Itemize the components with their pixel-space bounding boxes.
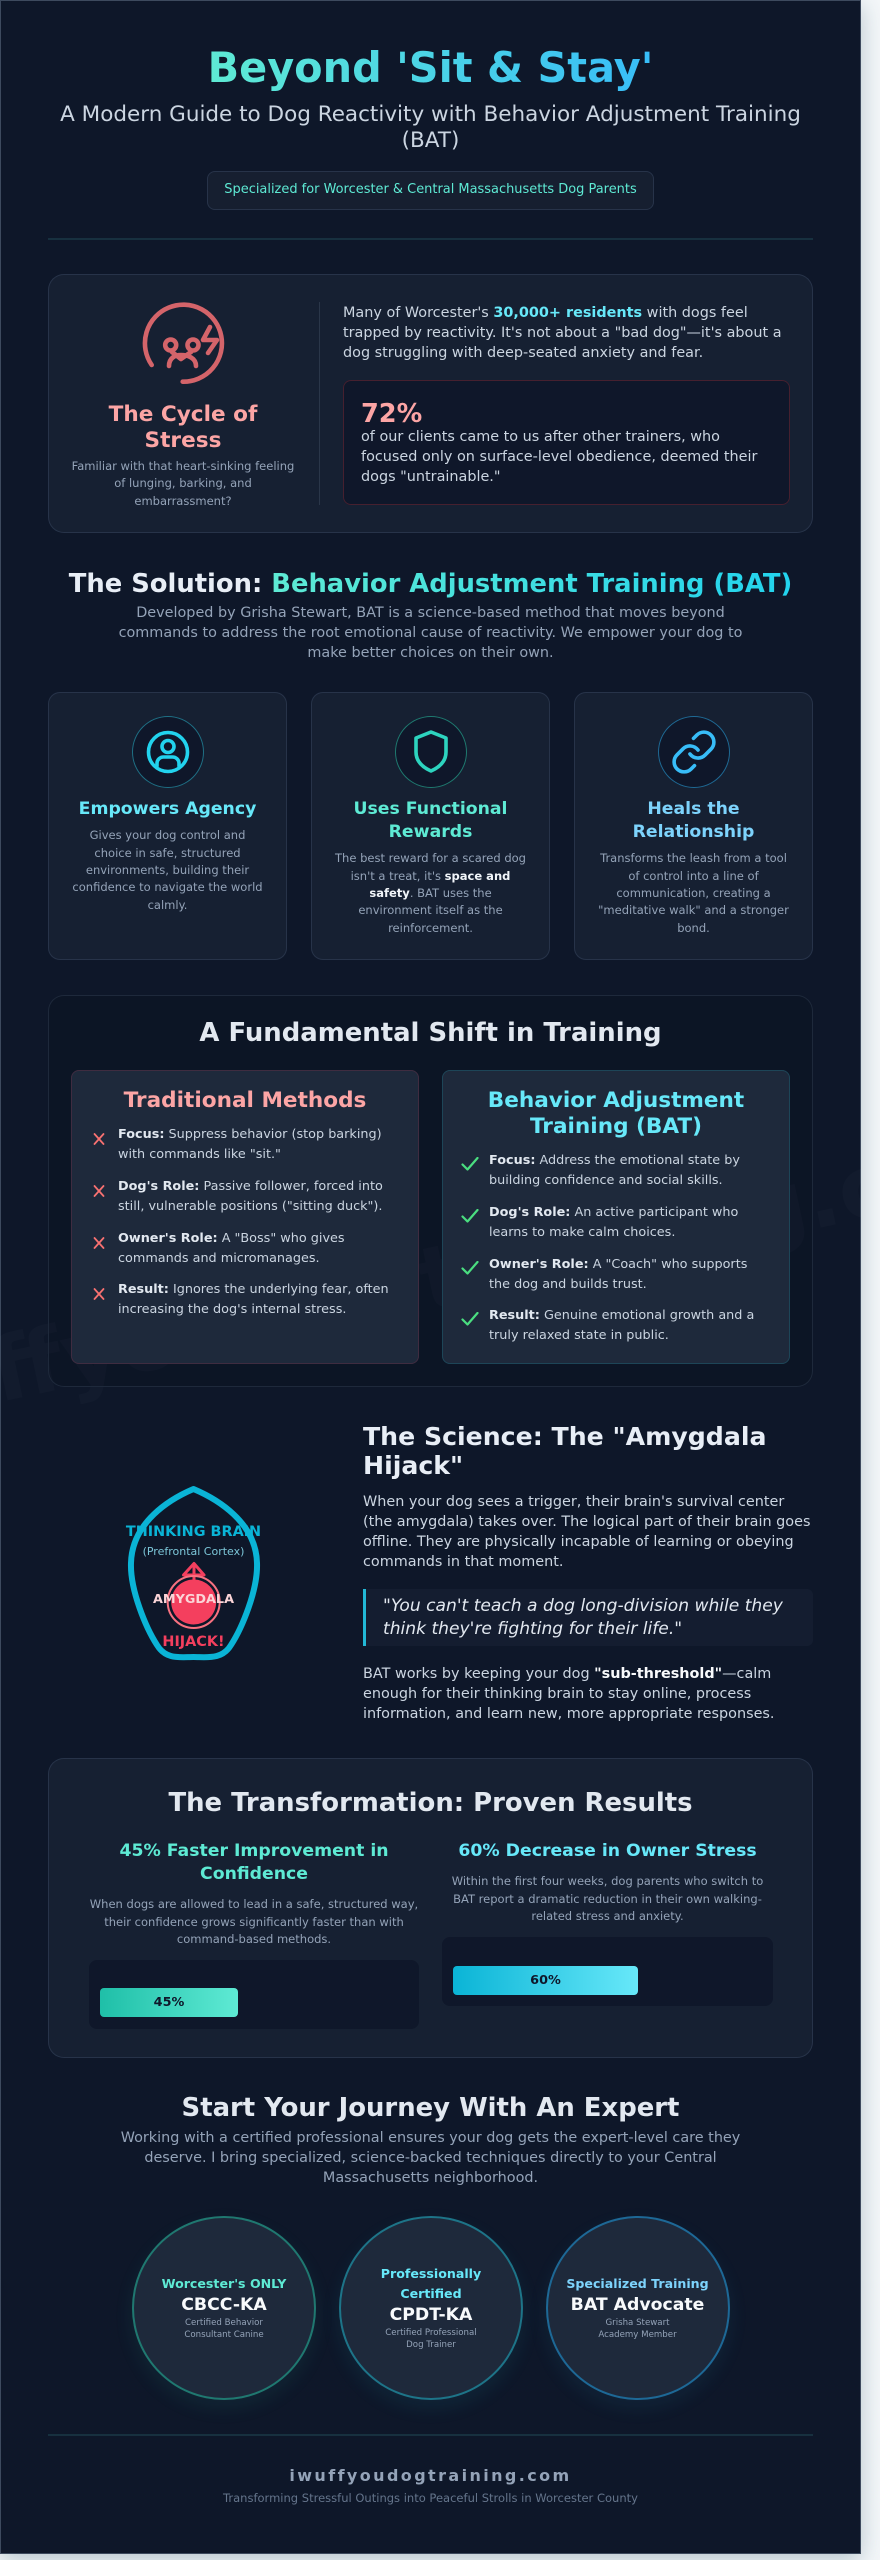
result description: [89, 1896, 419, 1948]
text: science paragraph: (the amygdala) takes over. The logical part of their brain goes: [363, 1514, 810, 1530]
item: focus: [118, 1127, 382, 1162]
statistic text: of our clients came to us after other trainers, who: [361, 429, 720, 445]
item: result: [118, 1282, 389, 1317]
text: solution paragraph: Developed by Grisha Stewart, BAT is a science-based method that moves beyond: [136, 605, 725, 621]
bar fill: 45%: [154, 1995, 184, 2010]
result: owner stress: [442, 1838, 773, 2008]
subtitle: (BAT): [402, 128, 459, 153]
badge detail: [339, 2328, 523, 2351]
heading: the cycle of stress: Stress: [145, 428, 221, 453]
text: sub-threshold paragraph: enough for their thinking brain to stay online, process: [363, 1686, 751, 1702]
panel: a fundamental shift in training: [48, 995, 813, 1387]
section: the science: [363, 1422, 810, 1722]
description: isn't a treat, it's space and: [351, 869, 510, 883]
icon: cross: [94, 1288, 104, 1300]
description: environment itself as the: [358, 903, 503, 917]
bar fill: [453, 1966, 638, 1995]
text: stress description: of lunging, barking, and: [114, 476, 252, 490]
description: reinforcement.: [388, 921, 473, 935]
icon: check: [461, 1209, 479, 1223]
bar chart: 60%: [442, 1937, 773, 2006]
diagram: amygdala hijack brain: (Prefrontal Cortex): [143, 1545, 244, 1558]
icon: chain link: [658, 716, 730, 788]
badge label: Professionally: [381, 2266, 481, 2281]
header: [60, 44, 801, 210]
badge label: Specialized Training: [566, 2276, 709, 2291]
badge name: BAT Advocate: [571, 2295, 704, 2315]
list: BAT items: [461, 1153, 754, 1343]
icon: check: [461, 1157, 479, 1171]
text: cta paragraph: deserve. I bring specialized, science-backed techniques directly to your Central: [144, 2150, 717, 2166]
item: owner's role: the dog and builds trust.: [489, 1277, 647, 1292]
panel: heals the relationship: [574, 692, 813, 960]
badge label: Certified: [400, 2286, 462, 2301]
item: dog's role: Dog's Role: Passive follower, forced into: [118, 1179, 383, 1194]
list: traditional items: [94, 1127, 389, 1317]
badge detail: Dog Trainer: [406, 2340, 456, 2350]
item: dog's role: learns to make calm choices.: [489, 1225, 675, 1240]
footer website: iwuffyoudogtraining.com: [289, 2466, 572, 2485]
icon: check: [461, 1312, 479, 1326]
footer: [48, 2460, 813, 2510]
badge: CPDT-KA: [339, 2216, 523, 2400]
description: choice in safe, structured: [94, 846, 241, 860]
text: solution paragraph: [119, 605, 742, 661]
text: science paragraph: offline. They are physically incapable of learning or obeying: [363, 1534, 794, 1550]
item: focus: with commands like "sit.": [118, 1147, 281, 1162]
item: focus: Focus: Address the emotional state by: [489, 1153, 740, 1168]
section: call to action: [48, 2090, 813, 2190]
badge detail: Grisha Stewart: [605, 2318, 670, 2328]
text: intro paragraph: Many of Worcester's 30,000+ residents with dogs feel: [343, 305, 748, 321]
text: sub-threshold paragraph: information, and learn new, more appropriate responses.: [363, 1706, 774, 1722]
panel: the transformation: [48, 1758, 813, 2058]
heading: the cycle of stress: [108, 402, 258, 453]
item: focus: building confidence and social skills.: [489, 1173, 723, 1188]
heading: the solution: The Solution: Behavior Adjustment Training (BAT): [69, 569, 792, 599]
description: confidence to navigate the world: [72, 880, 263, 894]
badge detail: [546, 2318, 730, 2341]
panel: the cycle of stress: [48, 274, 813, 533]
badge detail: [132, 2318, 316, 2341]
bar fill: [100, 1988, 238, 2017]
text: intro paragraph: dog struggling with deep-seated anxiety and fear.: [343, 345, 703, 361]
heading: [354, 799, 507, 842]
text: sub-threshold paragraph: BAT works by keeping your dog "sub-threshold"—calm: [363, 1666, 771, 1682]
icon: stressed face in broken circle: [142, 302, 224, 384]
text: cta paragraph: [48, 2128, 813, 2188]
panel: traditional methods: [71, 1070, 419, 1364]
heading: Relationship: [633, 822, 754, 842]
text: cta paragraph: Massachusetts neighborhood.: [323, 2170, 538, 2186]
diagram: amygdala hijack brain: HIJACK!: [162, 1634, 225, 1650]
text: solution paragraph: make better choices on their own.: [307, 645, 554, 661]
panel: behavior adjustment training: [442, 1070, 790, 1364]
diagram: amygdala hijack brain: THINKING BRAIN: [126, 1524, 261, 1540]
text: stress description: Familiar with that heart-sinking feeling: [72, 459, 294, 473]
heading: Empowers Agency: [79, 799, 256, 819]
description: environments, building their: [86, 863, 249, 877]
heading: The Science: The "Amygdala: [363, 1422, 766, 1450]
heading: The Transformation: Proven Results: [168, 1788, 693, 1818]
text: sub-threshold paragraph: [363, 1666, 774, 1722]
description: Transforms the leash from a tool: [600, 851, 787, 865]
description: of control into a line of: [628, 869, 759, 883]
result description: related stress and anxiety.: [531, 1909, 684, 1923]
badge detail: Certified Behavior: [185, 2318, 263, 2328]
item: result: truly relaxed state in public.: [489, 1328, 669, 1343]
item: result: increasing the dog's internal stress.: [118, 1302, 346, 1317]
item: owner's role: Owner's Role: A "Boss" who gives: [118, 1230, 345, 1246]
item: result: [489, 1308, 754, 1343]
result heading: 45% Faster Improvement in: [119, 1840, 389, 1860]
result description: Within the first four weeks, dog parents who switch to: [452, 1874, 763, 1888]
item: dog's role: [118, 1179, 383, 1214]
heading: Uses Functional: [354, 799, 507, 819]
description: [334, 851, 526, 935]
heading: [633, 799, 754, 842]
badge: BAT Advocate: [546, 2216, 730, 2400]
item: dog's role: [489, 1205, 738, 1240]
statistic text: focused only on surface-level obedience, deemed their: [361, 449, 757, 465]
result description: command-based methods.: [177, 1932, 331, 1946]
section: the solution intro: [68, 569, 792, 661]
result: confidence: [89, 1838, 419, 2030]
icon: check: [461, 1261, 479, 1275]
subtitle: [60, 102, 801, 153]
result description: When dogs are allowed to lead in a safe, structured way,: [90, 1897, 418, 1911]
title: Beyond 'Sit & Stay': [208, 44, 653, 92]
description: bond.: [677, 921, 710, 935]
item: result: Result: Ignores the underlying fear, often: [118, 1282, 389, 1297]
description: [72, 828, 263, 912]
text: science paragraph: commands in that moment.: [363, 1554, 563, 1570]
badge label: Worcester's ONLY: [162, 2276, 286, 2291]
result description: BAT report a dramatic reduction in their own walking-: [453, 1892, 762, 1906]
item: owner's role: Owner's Role: A "Coach" who supports: [489, 1256, 747, 1272]
result heading: Confidence: [200, 1864, 308, 1884]
item: owner's role: [489, 1256, 747, 1292]
location badge: [207, 171, 654, 210]
badge name: CBCC-KA: [181, 2295, 267, 2315]
heading: Hijack": [363, 1450, 463, 1480]
bar fill: 60%: [530, 1973, 561, 1988]
result description: [442, 1873, 773, 1925]
item: result: Result: Genuine emotional growth and a: [489, 1308, 754, 1323]
text: science paragraph: When your dog sees a trigger, their brain's survival center: [363, 1494, 784, 1510]
text: solution paragraph: commands to address the root emotional cause of reactivity. We empower your dog to: [119, 625, 742, 641]
badge name: CPDT-KA: [390, 2305, 472, 2325]
statistic text: [361, 429, 758, 485]
description: "meditative walk" and a stronger: [598, 903, 789, 917]
text: intro paragraph: [343, 305, 782, 361]
pull quote: think they're fighting for their life.": [383, 1618, 682, 1638]
icon: cross: [94, 1237, 104, 1249]
heading: Start Your Journey With An Expert: [182, 2093, 679, 2123]
column heading: Behavior Adjustment: [488, 1088, 744, 1113]
heading: Rewards: [389, 822, 472, 842]
statistic number: 72%: [361, 399, 422, 429]
icon: cross: [94, 1185, 104, 1197]
item: focus: [489, 1153, 740, 1188]
subtitle: A Modern Guide to Dog Reactivity with Behavior Adjustment Training: [60, 102, 801, 127]
pull quote: "You can't teach a dog long-division while they: [383, 1596, 783, 1616]
callout: 72% statistic: [343, 380, 790, 505]
result heading: [89, 1840, 419, 1886]
text: intro paragraph: trapped by reactivity. It's not about a "bad dog"—it's about a: [343, 325, 782, 341]
panel: uses functional rewards: [311, 692, 550, 960]
text: stress description: embarrassment?: [134, 494, 232, 508]
footer tagline: Transforming Stressful Outings into Peaceful Strolls in Worcester County: [223, 2491, 638, 2505]
item: focus: Focus: Suppress behavior (stop barking): [118, 1127, 382, 1142]
heading: Heals the: [647, 799, 740, 819]
description: Gives your dog control and: [90, 828, 245, 842]
panel: empowers agency: [48, 692, 287, 960]
badge label: [339, 2264, 523, 2304]
icon: shield: [395, 716, 467, 788]
item: owner's role: commands and micromanages.: [118, 1251, 320, 1266]
column heading: [488, 1088, 744, 1139]
column heading: Training (BAT): [530, 1114, 702, 1139]
icon: person in circle: [132, 716, 204, 788]
badge: CBCC-KA: [132, 2216, 316, 2400]
text: stress description: [72, 459, 294, 508]
bar chart: 45%: [89, 1960, 419, 2029]
column heading: Traditional Methods: [124, 1088, 366, 1113]
statistic text: dogs "untrainable.": [361, 469, 501, 485]
item: owner's role: [118, 1230, 345, 1266]
description: The best reward for a scared dog: [335, 851, 526, 865]
diagram: amygdala hijack brain: [126, 1486, 261, 1660]
item: dog's role: still, vulnerable positions ("sitting duck").: [118, 1199, 382, 1214]
location badge: Specialized for Worcester & Central Massachusetts Dog Parents: [224, 182, 637, 197]
item: dog's role: Dog's Role: An active participant who: [489, 1205, 738, 1220]
result description: their confidence grows significantly faster than with: [104, 1915, 404, 1929]
result heading: 60% Decrease in Owner Stress: [458, 1840, 757, 1860]
heading: [363, 1422, 766, 1480]
text: cta paragraph: Working with a certified professional ensures your dog gets the expert-level care they: [121, 2130, 740, 2146]
description: [598, 851, 789, 935]
heading: A Fundamental Shift in Training: [199, 1018, 662, 1048]
text: science paragraph: [363, 1494, 810, 1570]
badge detail: Academy Member: [598, 2330, 677, 2340]
heading: the cycle of stress: The Cycle of: [109, 402, 257, 427]
description: safety. BAT uses the: [369, 886, 492, 900]
description: communication, creating a: [616, 886, 771, 900]
badge detail: Certified Professional: [385, 2328, 477, 2338]
diagram: amygdala hijack brain: AMYGDALA: [153, 1592, 234, 1607]
icon: cross: [94, 1133, 104, 1145]
description: calmly.: [148, 898, 187, 912]
pull quote: [363, 1589, 813, 1646]
badge detail: Consultant Canine: [184, 2330, 264, 2340]
